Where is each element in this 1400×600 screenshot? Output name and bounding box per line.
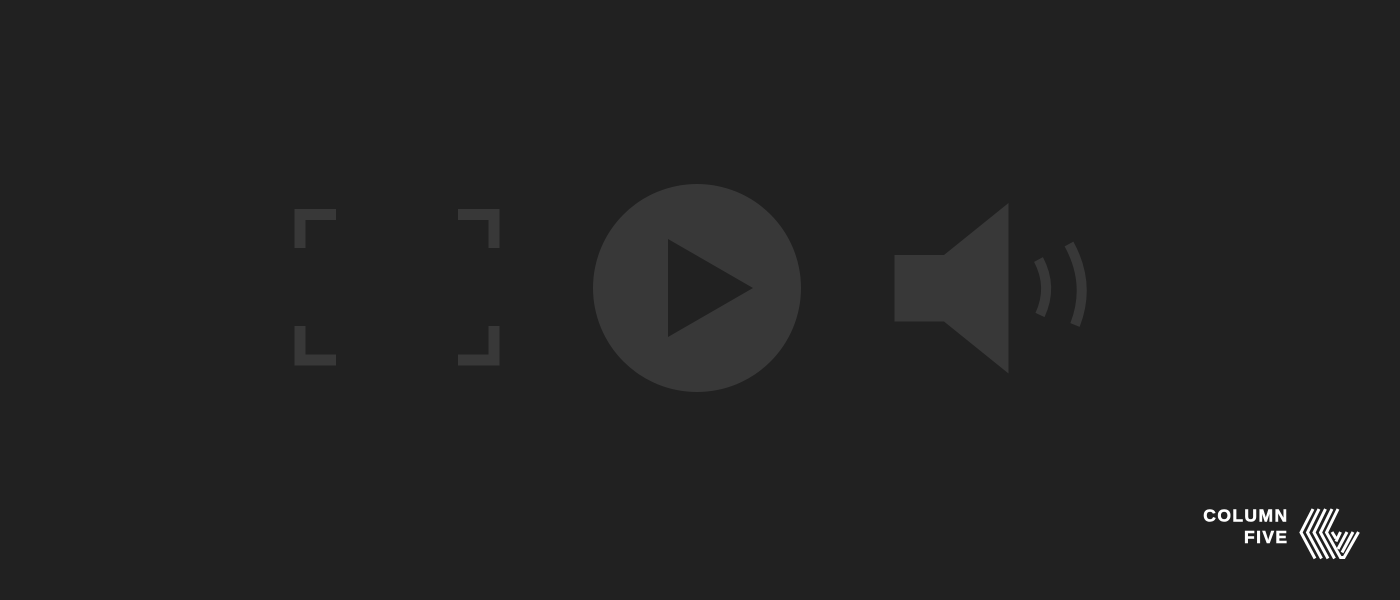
logo wordmark: FIVE — [1244, 527, 1288, 547]
icon: play button — [593, 184, 801, 392]
logo: Column Five — [1203, 506, 1358, 558]
logo wordmark — [1203, 506, 1288, 547]
icon: fullscreen brackets — [294, 209, 500, 366]
icon: speaker with sound waves — [894, 203, 1082, 374]
logo mark: chevron stripes — [1301, 509, 1358, 558]
logo wordmark: COLUMN — [1203, 506, 1288, 526]
